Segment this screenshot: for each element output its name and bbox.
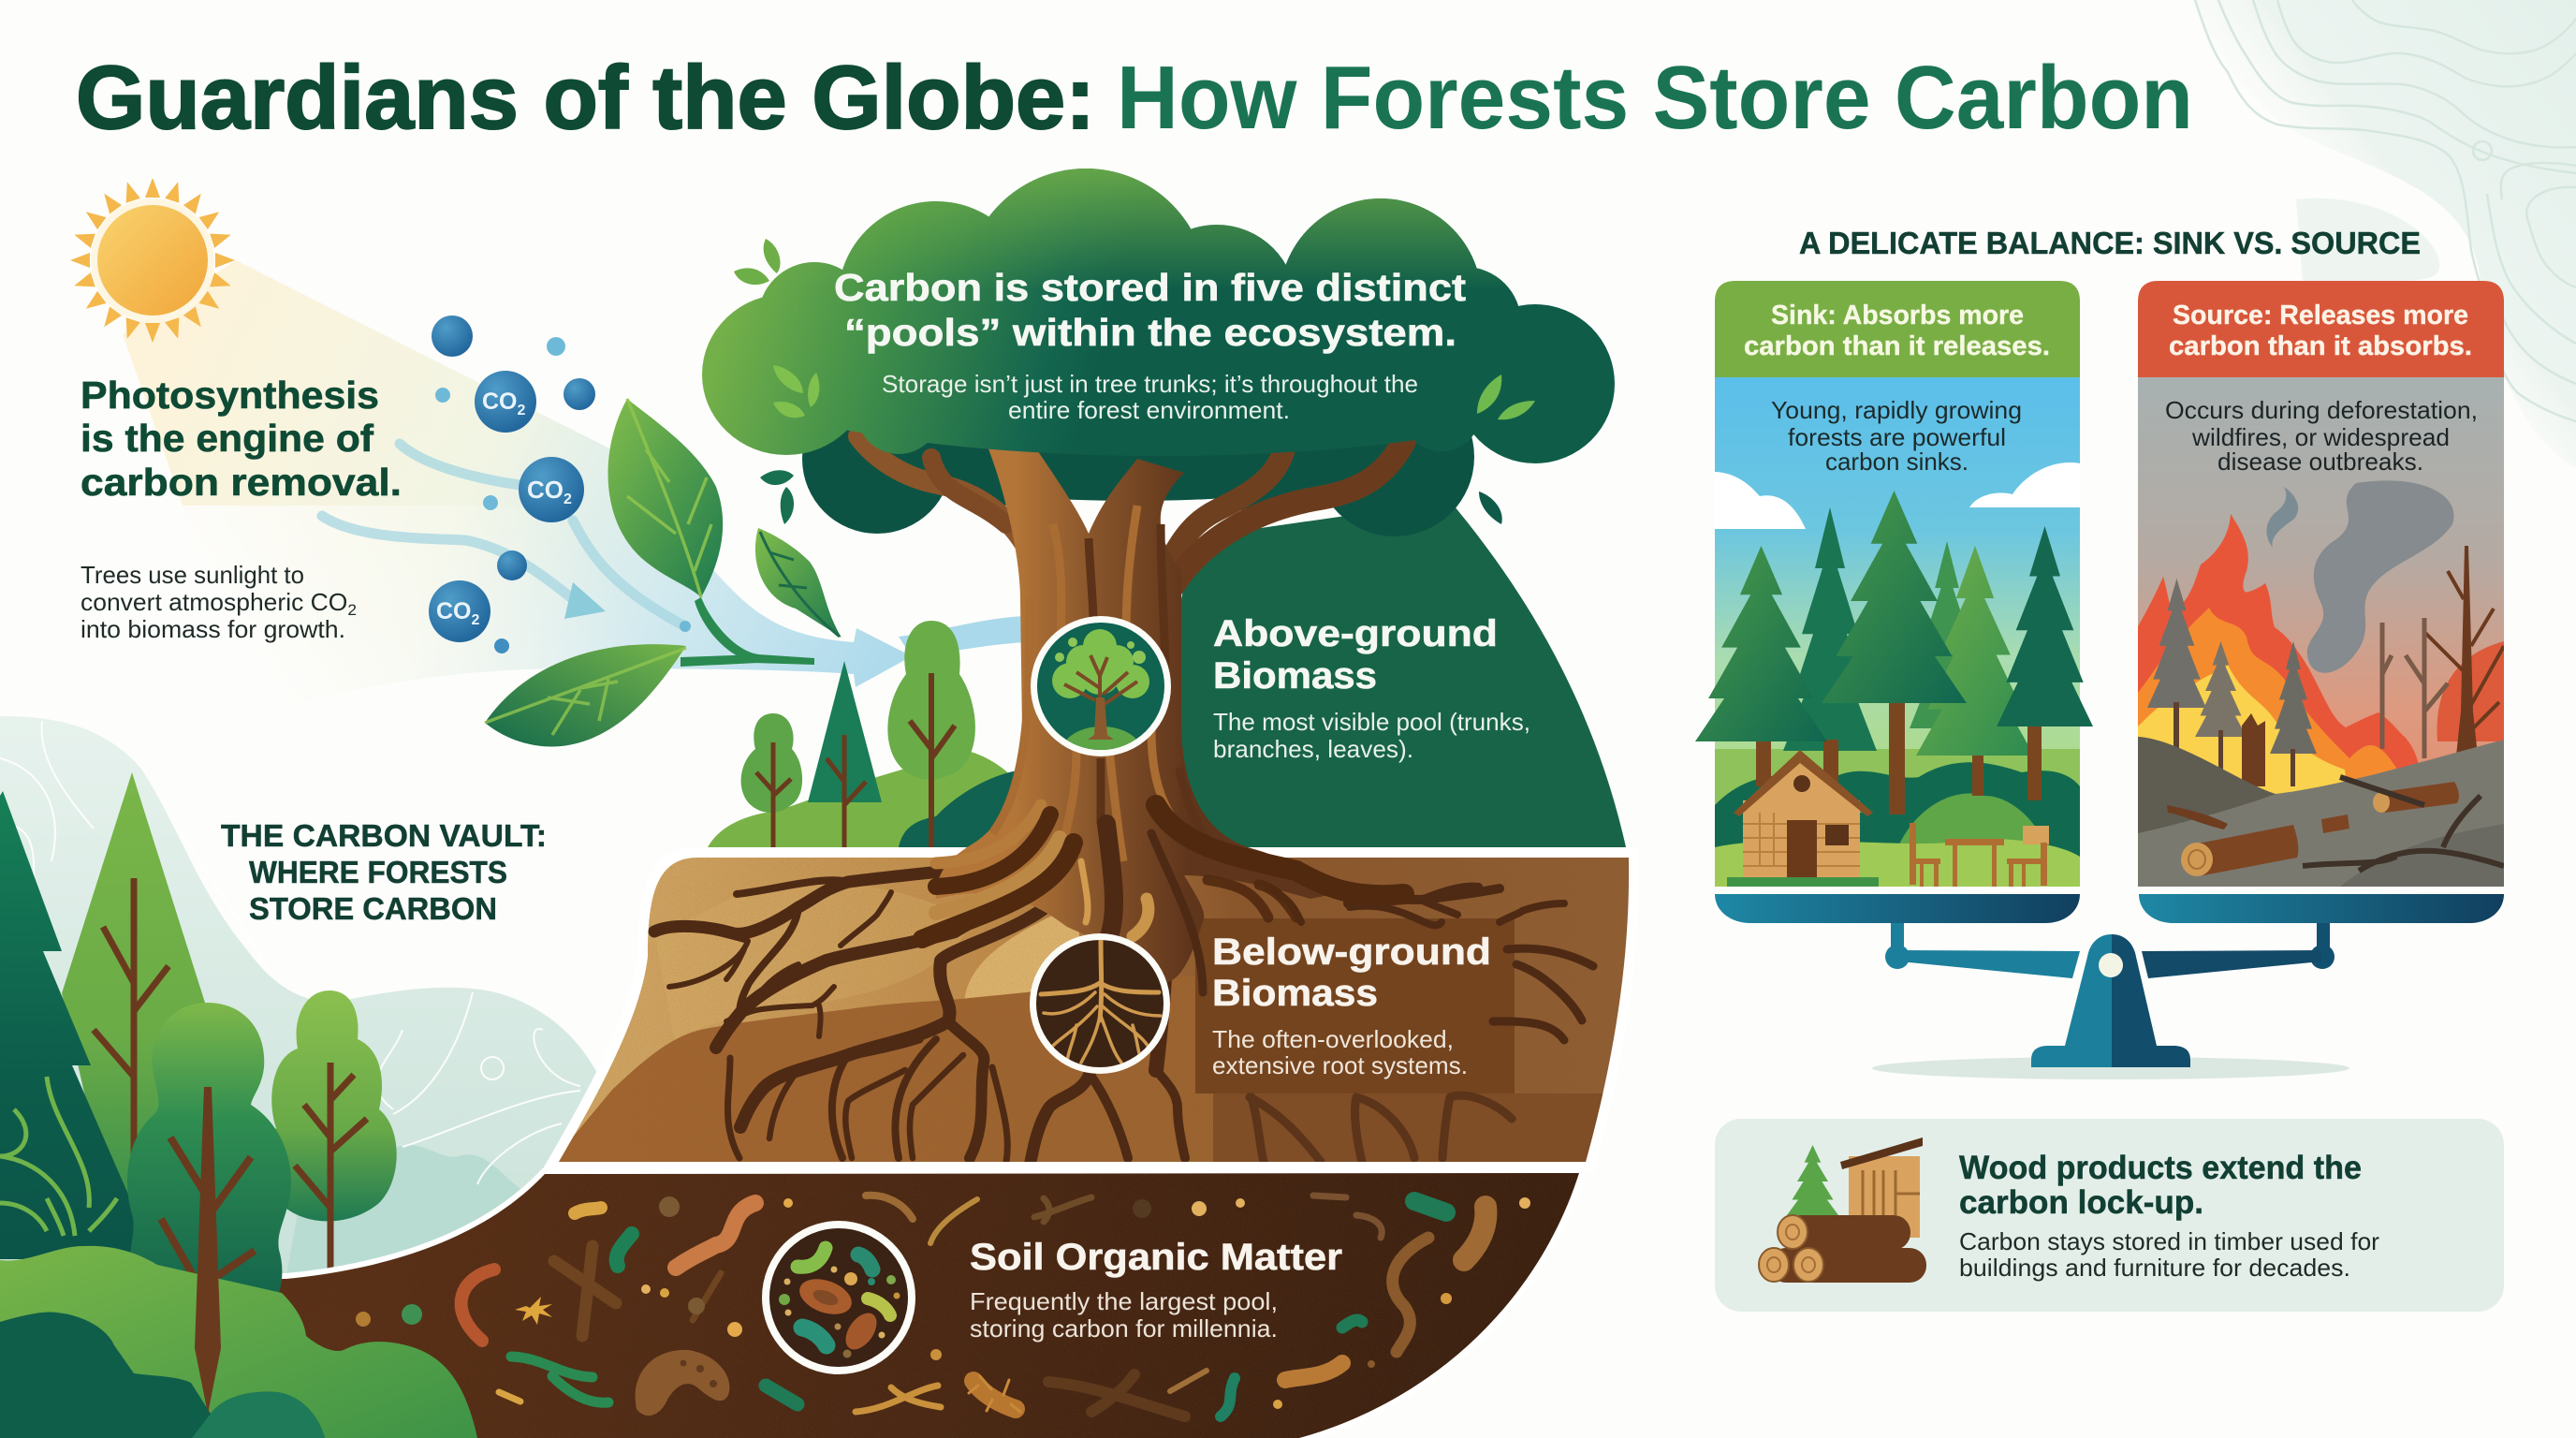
body text: Young, rapidly growing [1771,396,2022,424]
title: Guardians of the Globe: [76,48,1095,148]
header bar [2138,281,2504,377]
text: above-ground biomass: branches, leaves). [1213,735,1413,763]
root system [654,866,1593,1162]
header text: carbon than it releases. [1744,331,2050,361]
text: canopy heading [834,266,1466,354]
icon: sun [70,178,235,343]
header text [1744,301,2050,361]
light bushes [0,1246,477,1438]
dead trees [2424,546,2504,765]
text: above-ground biomass: The most visible pool (trunks, [1213,708,1530,736]
panel: below-ground biomass [552,852,1638,1170]
CO2 molecules [429,315,595,653]
CO2 molecules: 2 [564,492,572,507]
text: soil organic matter: storing carbon for millennia. [970,1314,1278,1343]
heading: delicate balance: A DELICATE BALANCE: SINK VS. SOURCE [1799,226,2421,260]
panel: source card [2138,281,2504,887]
tree canopy back [802,377,1474,536]
text: canopy heading: Carbon is stored in five distinct [834,266,1466,309]
text: below-ground biomass: Below-ground [1212,932,1491,973]
forest scene: left foreground [0,772,477,1438]
conifer forest [1695,491,2093,814]
panel: wood products callout [1715,1119,2504,1312]
text: photosynthesis heading: carbon removal. [80,461,402,504]
callout heading: carbon lock-up. [1959,1184,2203,1221]
panel: above-ground biomass background [1181,501,1626,847]
scorched ground [2138,737,2504,887]
title [76,48,2193,148]
CO2 molecules: 2 [472,612,479,628]
body text: forests are powerful [1788,423,2006,451]
callout heading [1959,1150,2362,1221]
decoration: pale map blob with contour lines [0,716,599,1279]
balance scale [1715,894,2504,1079]
text: soil organic matter [970,1237,1342,1343]
text: photosynthesis description: into biomass for growth. [80,615,345,643]
text: photosynthesis description: convert atmospheric CO [80,588,343,616]
logs [2198,825,2298,875]
icon: soil organisms [762,1221,915,1374]
header text: carbon than it absorbs. [2169,331,2472,361]
callout text: Carbon stays stored in timber used for [1959,1227,2379,1255]
text: photosynthesis heading [80,374,402,504]
icon: tree, cabin and logs [1759,1137,1926,1283]
big round tree [127,1003,291,1338]
grass fronds [0,1077,117,1236]
text: photosynthesis description: Trees use sunlight to [80,561,304,589]
body text: Occurs during deforestation, [2165,396,2478,424]
text: soil organic matter: Frequently the largest pool, [970,1287,1278,1315]
CO2 molecules: 2 [517,403,526,418]
body text: carbon sinks. [1825,448,1969,476]
header text: Source: Releases more [2173,301,2468,330]
text: photosynthesis description: 2 [347,601,357,619]
body text [1771,396,2022,476]
text: photosynthesis description [80,561,357,643]
header text [2169,301,2472,361]
panel: sink card [1695,281,2093,887]
CO2 molecules: CO [436,598,472,624]
tree trunk and branches [858,435,1404,992]
flames [2138,514,2419,777]
header text: Sink: Absorbs more [1771,301,2024,330]
text: canopy heading: “pools” within the ecosystem. [844,311,1456,354]
body text: disease outbreaks. [2217,448,2423,476]
CO2 molecules: CO [482,389,517,415]
tree canopy front with text [702,169,1619,524]
soil organisms [461,1196,1486,1416]
big tree trunk [195,1087,221,1414]
small round tree [270,990,397,1277]
decoration: top-right contour pattern [2195,0,2576,468]
text: below-ground biomass [1212,932,1491,1079]
small forest beside trunk [708,621,1025,847]
text: below-ground biomass: extensive root systems. [1212,1051,1468,1079]
light conifer [62,772,205,1217]
text: above-ground biomass: Biomass [1213,655,1377,697]
callout text [1959,1227,2379,1282]
text: photosynthesis heading: Photosynthesis [80,374,379,417]
light beam and CO2 flow [112,260,1025,726]
burnt trees [2147,579,2206,708]
text: the carbon vault heading: WHERE FORESTS [249,855,507,889]
text: canopy subheading: Storage isn’t just in tree trunks; it’s throughout the [882,370,1418,398]
icon: roots [1030,933,1170,1074]
text: soil organic matter: Soil Organic Matter [970,1237,1342,1278]
text: below-ground biomass: Biomass [1212,973,1378,1014]
title: How Forests Store Carbon [1117,48,2193,148]
text: the carbon vault heading: STORE CARBON [249,891,497,926]
leaves [485,399,842,747]
dark bushes [0,1313,325,1438]
text: below-ground biomass: The often-overlooked, [1212,1025,1454,1053]
text: above-ground biomass [1213,613,1530,763]
callout heading: Wood products extend the [1959,1150,2362,1186]
callout text: buildings and furniture for decades. [1959,1254,2350,1282]
text: canopy subheading: entire forest environment. [1008,396,1290,424]
icon: above-ground tree [1031,616,1171,756]
smoke [2307,480,2454,673]
table and chairs [1910,823,2049,887]
CO2 molecules: CO [527,476,564,504]
root flare [922,805,1404,992]
text: above-ground biomass: Above-ground [1213,613,1498,654]
text: the carbon vault heading: THE CARBON VAULT: [221,818,547,853]
text: photosynthesis heading: is the engine of [80,417,373,460]
body text: wildfires, or widespread [2191,423,2450,451]
header bar [1715,281,2080,377]
body text [2165,396,2478,476]
leaf accents [734,239,1535,524]
text: canopy subheading [882,370,1418,424]
panel: soil organic matter [279,1168,1579,1438]
text: the carbon vault heading [221,818,547,926]
dark conifer [0,791,139,1259]
log cabin [1727,750,1879,887]
